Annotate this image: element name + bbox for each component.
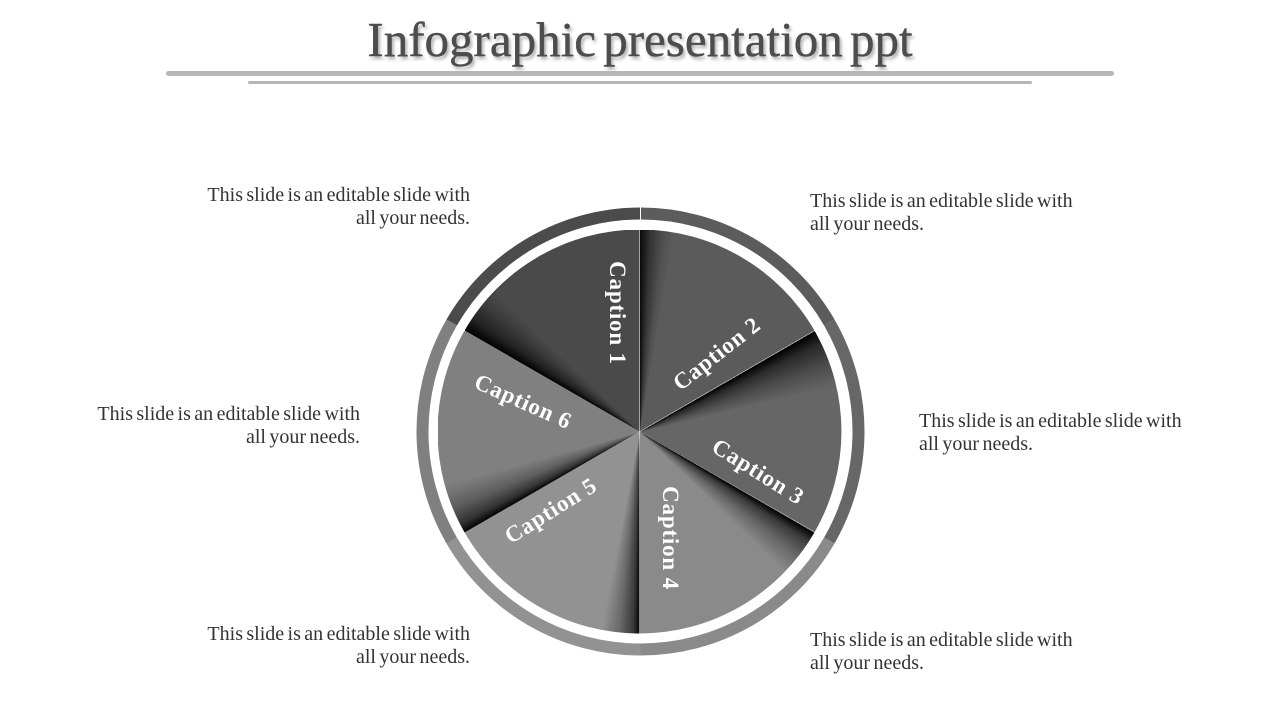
sector 3 [640,330,842,532]
text block: middle left: all your needs. [246,426,360,448]
title: Infographic presentation ppt [367,12,913,67]
caption 1: Caption 1 [605,261,630,365]
sector 1 [465,230,640,432]
text block: middle right [919,410,1182,454]
text block: middle right: all your needs. [919,432,1033,454]
sector 2 [640,230,814,432]
text block: middle left: This slide is an editable slide with [97,403,360,425]
text block: bottom left: all your needs. [356,646,470,668]
text block: top left: all your needs. [356,206,470,228]
text block: middle right: This slide is an editable slide with [919,410,1182,432]
outer ring [416,208,864,656]
caption 3: Caption 3 [708,433,809,510]
text block: bottom right [810,629,1073,674]
title rule: long [166,71,1114,76]
caption 5: Caption 5 [500,473,601,549]
text block: bottom left: This slide is an editable slide with [207,623,470,645]
sector 5 [465,432,640,634]
text block: top right: all your needs. [810,212,924,234]
text block: bottom right: This slide is an editable slide with [810,629,1073,651]
text block: bottom left [207,623,470,668]
caption 4: Caption 4 [658,486,683,590]
sector 4 [640,432,814,634]
sector 6 [438,330,640,532]
text block: middle left [97,403,360,448]
text block: top left: This slide is an editable slide with [207,184,470,206]
text block: bottom right: all your needs. [810,652,924,674]
text block: top right: This slide is an editable slide with [810,190,1073,212]
text block: top right [810,190,1073,234]
title rule: short [248,81,1032,84]
caption 2: Caption 2 [668,312,765,395]
text block: top left [207,184,470,228]
caption 6: Caption 6 [471,369,576,434]
